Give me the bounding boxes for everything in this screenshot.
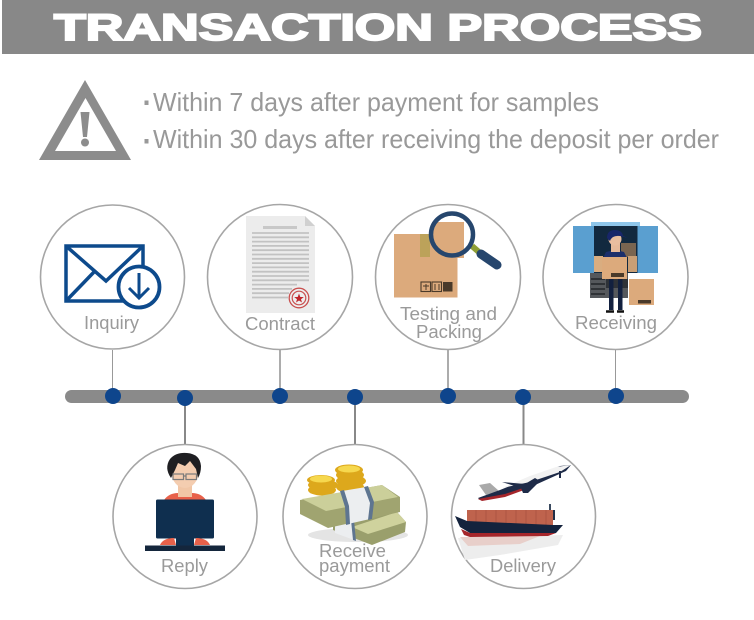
step: inquiry: Inquiry	[84, 312, 140, 333]
lower money bundle	[333, 512, 406, 545]
step: receive payment: payment	[319, 555, 390, 576]
step: receive payment: Receive	[319, 540, 386, 561]
step: contract	[208, 204, 352, 350]
notice text: Within 7 days after payment for samples	[153, 87, 599, 117]
ship	[455, 504, 563, 560]
icon: warning triangle	[39, 80, 131, 160]
timeline	[65, 350, 689, 444]
step: receive payment	[283, 444, 427, 588]
step: contract: Contract	[245, 313, 315, 334]
step: receiving	[543, 204, 688, 350]
notice text	[144, 87, 719, 154]
upper money bundle	[300, 485, 400, 528]
step: receiving: Receiving	[575, 312, 657, 333]
coin stacks	[307, 464, 366, 496]
notice text: Within 30 days after receiving the deposit per order	[153, 124, 719, 154]
step: reply	[113, 444, 257, 588]
header banner	[2, 0, 754, 54]
step: inquiry	[40, 205, 184, 349]
step: delivery	[452, 444, 596, 588]
step: reply: Reply	[161, 555, 209, 576]
plane	[478, 465, 571, 501]
step: delivery: Delivery	[490, 555, 557, 576]
step: testing and packing: Testing and	[400, 303, 497, 324]
step: testing and packing: Packing	[416, 321, 482, 342]
step: testing and packing	[376, 204, 520, 350]
title: TRANSACTION PROCESS	[54, 6, 702, 48]
